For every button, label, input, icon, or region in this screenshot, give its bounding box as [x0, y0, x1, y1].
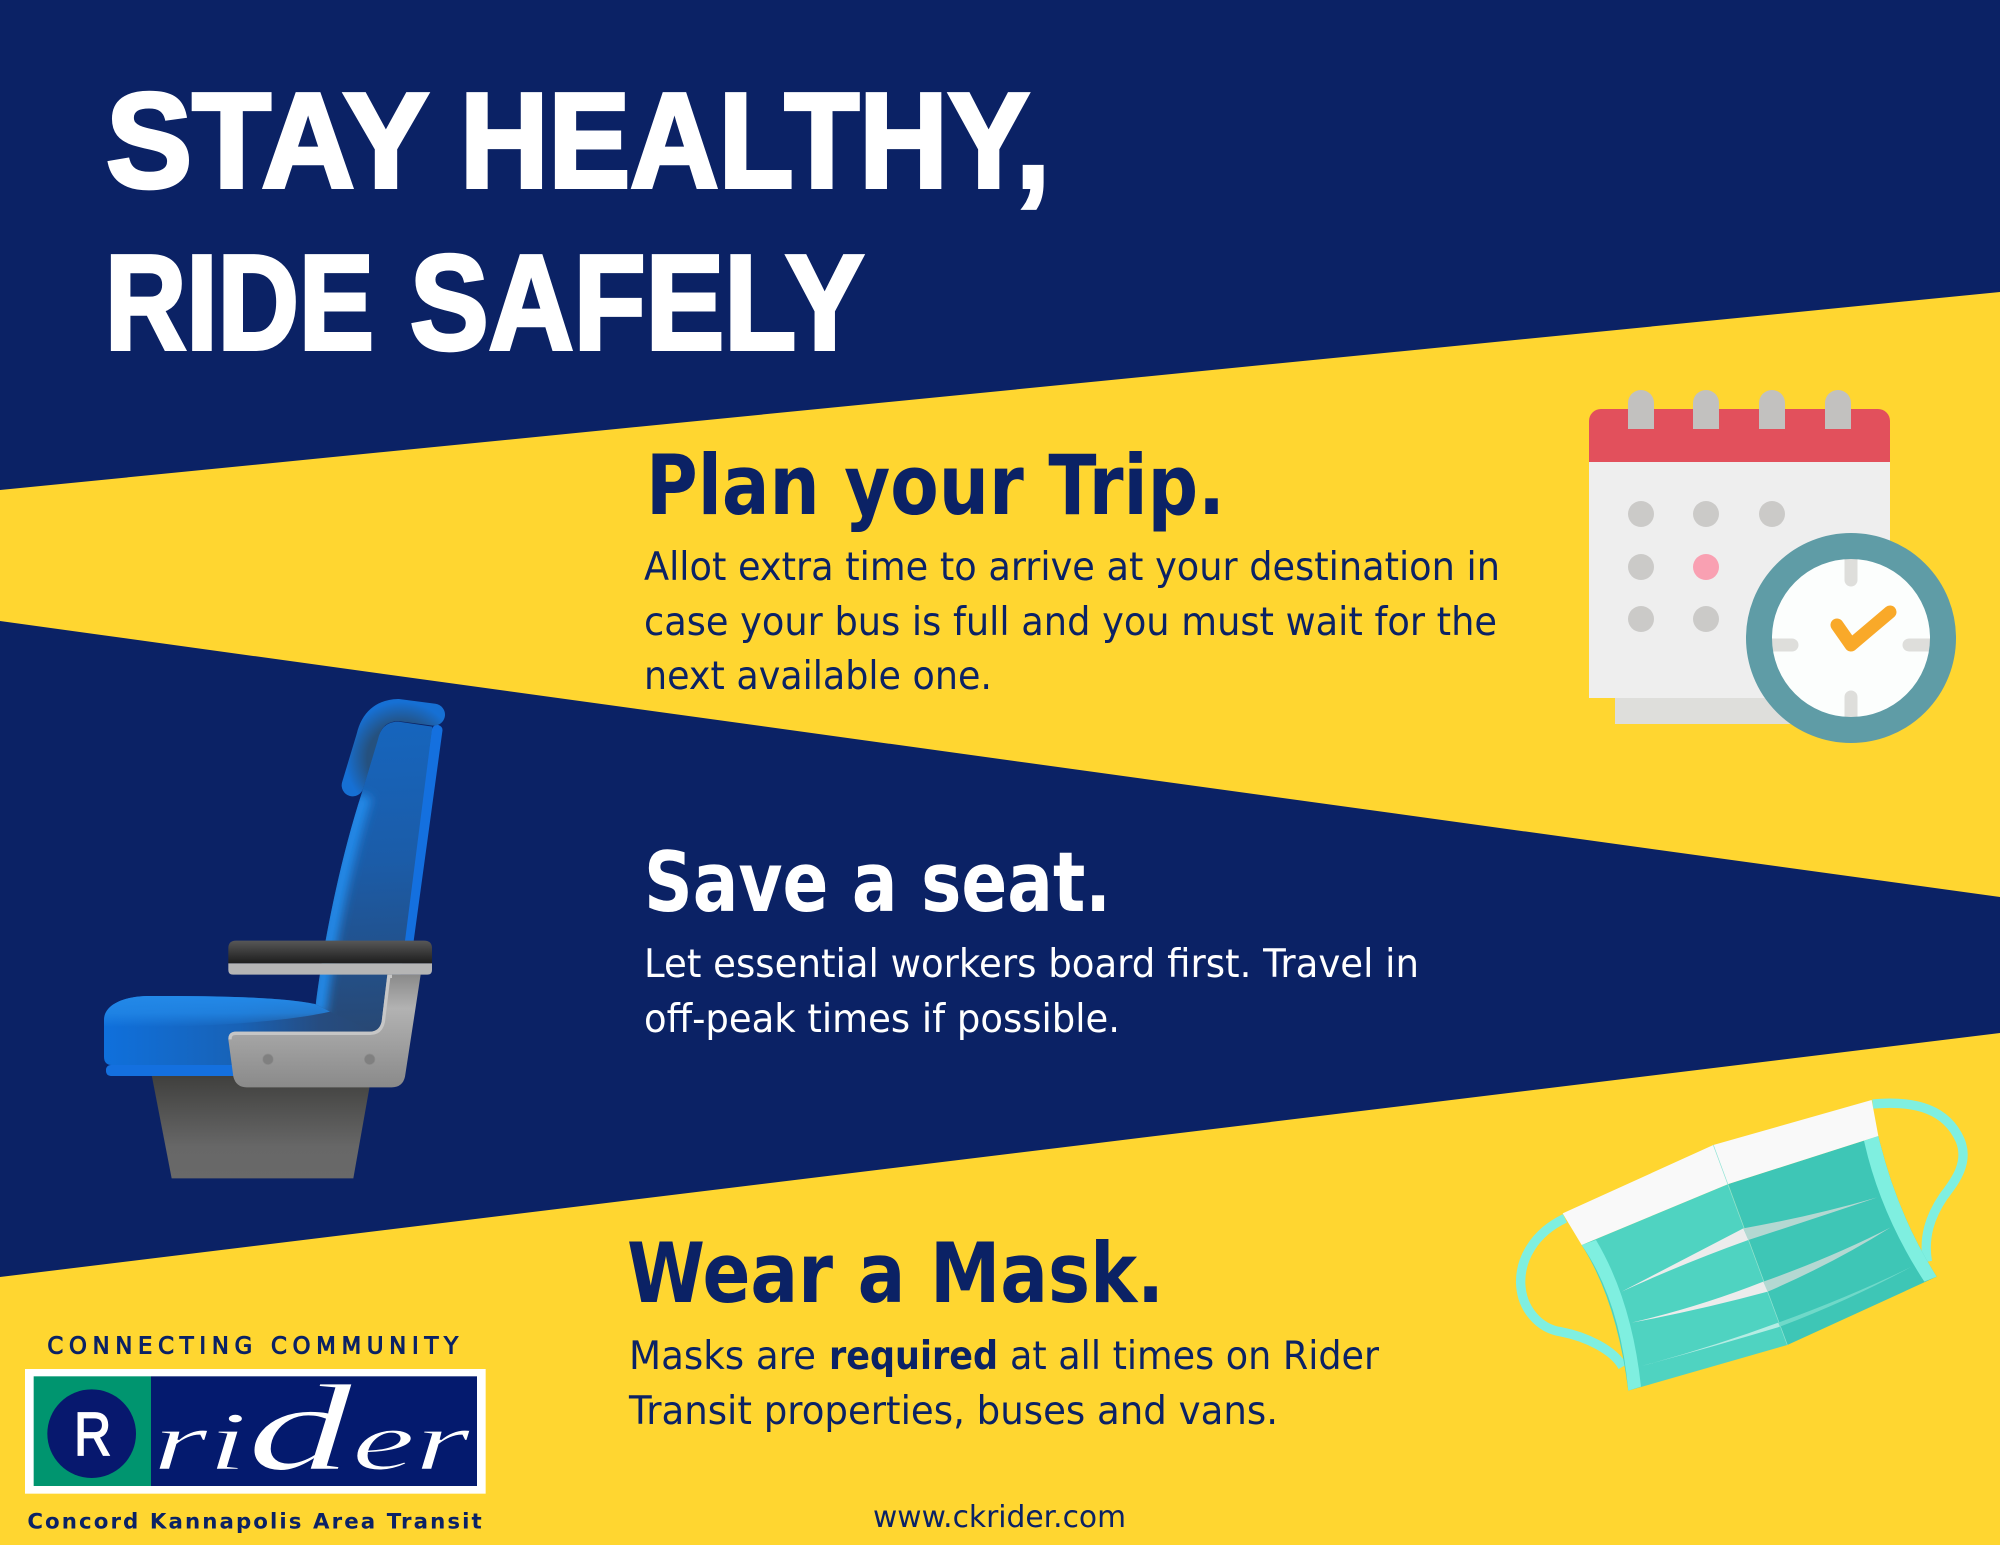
text: wear a mask body: Transit properties, buses and vans.: [628, 1389, 1278, 1434]
logo navy panel: [151, 1376, 477, 1486]
calendar page shadow: [1615, 698, 1815, 724]
logo wordmark: rider: [153, 1360, 471, 1497]
mask left panel: [1582, 1184, 1787, 1391]
mask top band: [1563, 1100, 1878, 1245]
title: HEALTHY,: [460, 65, 1050, 216]
seat cushion: [104, 996, 373, 1065]
heading: save a seat: Save a seat.: [644, 834, 1111, 931]
mask centre fold: [1713, 1145, 1787, 1345]
text: wear a mask body: at all times on Rider: [1010, 1334, 1380, 1379]
text: wear a mask body: [628, 1334, 1380, 1434]
website url: www.ckrider.com: [873, 1500, 1126, 1535]
text: wear a mask body: required: [829, 1334, 998, 1379]
logo green panel: [34, 1376, 151, 1486]
logo circle: [47, 1389, 136, 1478]
calendar rings: [1628, 390, 1851, 429]
seat lower strip: [106, 1065, 239, 1076]
calendar header: [1589, 409, 1890, 462]
title: STAY: [106, 65, 429, 216]
title: RIDE: [105, 227, 374, 378]
icon: calendar with clock: [1589, 390, 1945, 735]
mask pleats left: [1622, 1228, 1748, 1292]
logo frame: [25, 1369, 486, 1494]
section: wear a mask: [627, 1225, 1380, 1434]
armrest pad: [228, 941, 432, 963]
cushion highlight: [104, 996, 330, 1027]
text: plan your trip body: [644, 545, 1500, 699]
calendar page: [1589, 462, 1890, 698]
rivets: [263, 1054, 375, 1065]
logo R: R: [74, 1400, 111, 1469]
section: save a seat: [644, 834, 1419, 1042]
text: save a seat body: [644, 942, 1419, 1042]
mask pleats right: [1743, 1197, 1877, 1240]
heading: wear a mask: Wear a Mask.: [627, 1225, 1164, 1322]
right ear loop: [1873, 1103, 1963, 1262]
logo: rider: [25, 1333, 486, 1534]
band: top yellow: [0, 292, 2000, 897]
logo tagline: CONNECTING COMMUNITY: [47, 1333, 458, 1359]
logo subtitle: Concord Kannapolis Area Transit: [27, 1509, 482, 1534]
title: SAFELY: [410, 227, 864, 378]
icon: face mask: [1521, 1100, 1963, 1391]
armrest plate: [228, 963, 432, 975]
arm support: [228, 975, 421, 1087]
left ear loop: [1521, 1218, 1623, 1367]
text: plan your trip body: next available one.: [644, 654, 992, 699]
mask right panel: [1728, 1136, 1937, 1345]
arm support highlight: [228, 975, 392, 1039]
text: wear a mask body: Masks are: [629, 1334, 816, 1379]
clock: [1755, 545, 1945, 735]
seat base: [152, 1075, 372, 1178]
text: save a seat body: Let essential workers board first. Travel in: [644, 942, 1419, 987]
text: plan your trip body: case your bus is full and you must wait for the: [644, 600, 1497, 645]
calendar dots: [1628, 501, 1785, 632]
text: save a seat body: off-peak times if possible.: [644, 997, 1120, 1042]
text: plan your trip body: Allot extra time to arrive at your destination in: [644, 545, 1500, 590]
seat back outer strip: [403, 725, 442, 943]
icon: bus seat: [104, 710, 442, 1178]
title: [105, 65, 1050, 378]
mask side strips: [1582, 1240, 1641, 1391]
headrest: [353, 710, 434, 785]
seat back highlight: [318, 795, 364, 1013]
heading: plan your trip: Plan your Trip.: [646, 437, 1225, 534]
section: plan your trip: [644, 437, 1500, 699]
band: bottom yellow: [0, 1033, 2000, 1545]
seat back: [316, 722, 432, 1032]
